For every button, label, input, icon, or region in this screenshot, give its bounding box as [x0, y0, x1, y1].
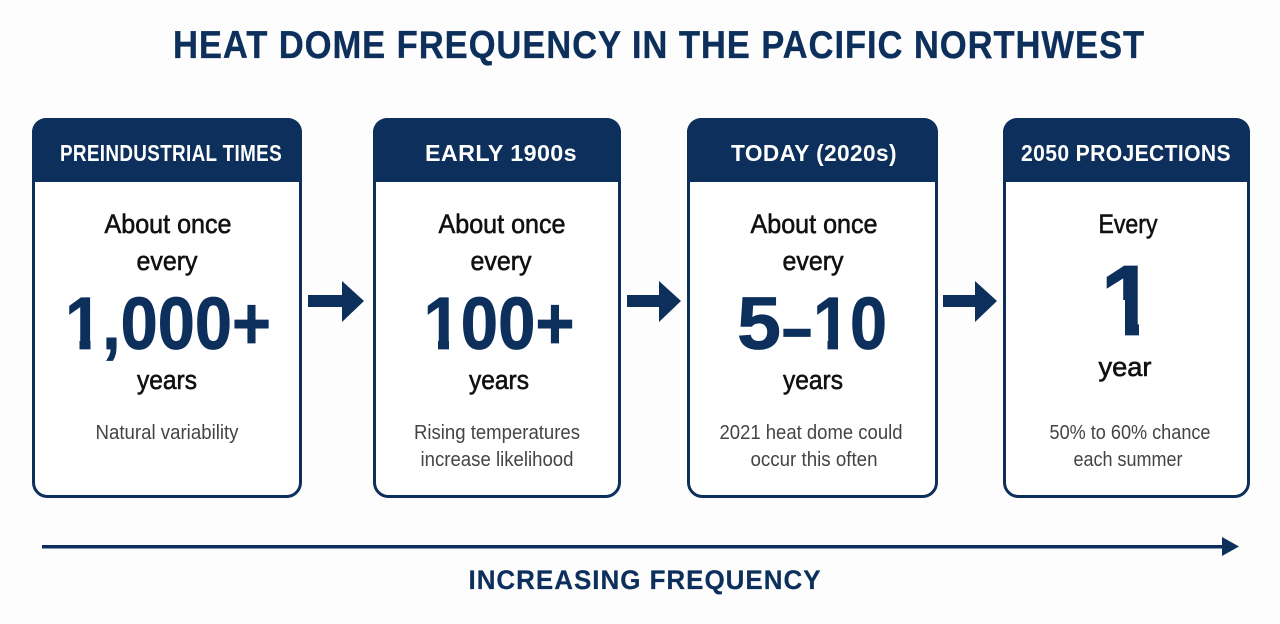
note: 2021 heat dome: 2021 heat dome could — [720, 422, 902, 444]
arrow: increasing frequency — [42, 537, 1239, 556]
note: 50% to 60% chance: each summer — [1074, 449, 1183, 471]
text: about once every — [750, 209, 878, 276]
title: HEAT DOME FREQUENCY IN THE PACIFIC NORTHWEST — [173, 24, 1145, 67]
text: years: years — [783, 365, 843, 395]
label: increasing frequency: INCREASING FREQUENCY — [468, 565, 822, 595]
text: about once every: every — [782, 246, 844, 276]
text: about once every: About once — [438, 209, 566, 239]
note: rising temperatures: Rising temperatures — [414, 422, 580, 444]
panel header: early 1900s: EARLY 1900s — [425, 140, 577, 166]
panel header: preindustrial times: PREINDUSTRIAL TIMES — [60, 140, 282, 166]
arrow: third to fourth — [943, 281, 997, 322]
panel header: today (2020s) — [687, 118, 938, 182]
panel: early 1900s — [373, 118, 621, 496]
panel header: 2050 projections — [1003, 118, 1250, 182]
panel: today (2020s) — [687, 118, 938, 496]
text: about once every: About once — [104, 209, 232, 239]
note: rising temperatures: increase likelihood — [420, 449, 574, 471]
note: 50% to 60% chance — [1050, 422, 1210, 471]
panel header: 2050 projections: 2050 PROJECTIONS — [1021, 140, 1231, 166]
text: every: Every — [1098, 209, 1158, 239]
panel: preindustrial times — [32, 118, 302, 496]
arrow: second to third — [627, 281, 681, 322]
panel: 2050 projections — [1003, 118, 1250, 496]
note: natural variability: Natural variability — [96, 422, 238, 444]
text: about once every: About once — [750, 209, 878, 239]
text: about once every — [438, 209, 566, 276]
number: 5–10: 5 — [737, 282, 781, 365]
text: years: years — [137, 365, 197, 395]
note: rising temperatures — [414, 422, 580, 471]
text: about once every: every — [136, 246, 198, 276]
number: 5–10 — [738, 296, 885, 350]
text: about once every — [104, 209, 232, 276]
note: 50% to 60% chance: 50% to 60% chance — [1050, 422, 1210, 444]
number: 5–10: 10 — [813, 282, 887, 365]
note: 2021 heat dome — [720, 422, 902, 471]
panel header: today (2020s): TODAY (2020s) — [731, 140, 897, 166]
text: about once every: every — [470, 246, 532, 276]
panel header: early 1900s — [373, 118, 621, 182]
number: 100+: 100+ — [424, 282, 574, 365]
panel header: preindustrial times — [32, 118, 302, 182]
number: 1,000+: 1,000+ — [65, 282, 271, 365]
text: year: year — [1098, 352, 1152, 382]
number: 1: 1 — [1100, 245, 1156, 357]
note: 2021 heat dome: occur this often — [750, 449, 878, 471]
number: 5–10: – — [782, 286, 812, 369]
text: years: years — [469, 365, 529, 395]
arrow: first to second — [308, 281, 364, 322]
